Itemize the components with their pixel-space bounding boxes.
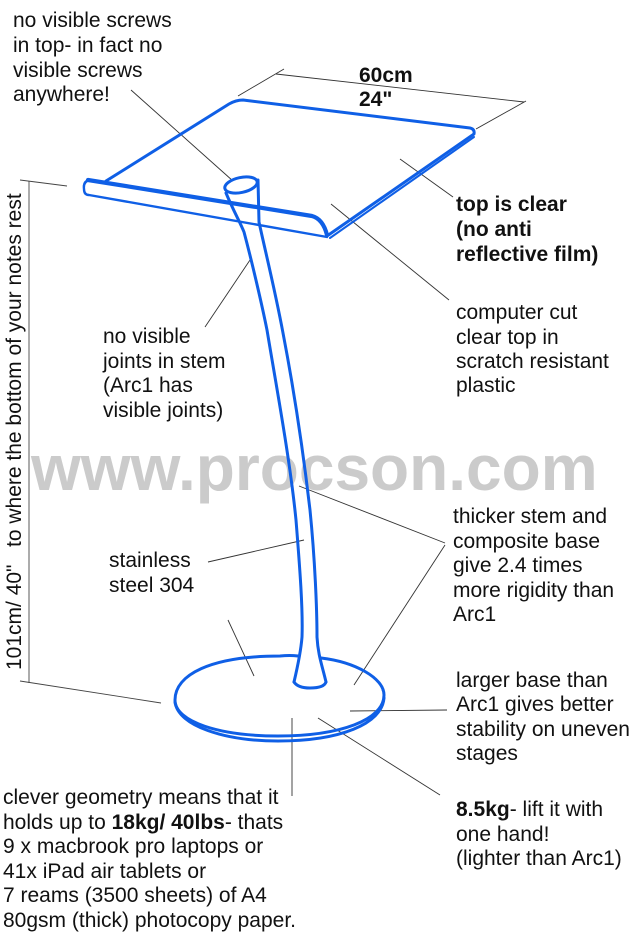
note: top is clear: (no anti (456, 218, 532, 241)
note: stainless: stainless (109, 549, 191, 572)
note: top is clear: reflective film) (456, 243, 598, 266)
watermark: www.procson.com (30, 432, 598, 504)
leader lines (131, 90, 453, 796)
note: weight: (lighter than Arc1) (456, 847, 622, 870)
heading: dimensions: 24" (359, 88, 392, 111)
lectern illustration (84, 100, 474, 741)
note: rigidity: give 2.4 times (453, 554, 583, 577)
note: computer cut: computer cut (456, 301, 578, 324)
note: clever geometry: 41x iPad air tablets or (3, 860, 206, 883)
heading: dimensions: 60cm (359, 64, 413, 87)
note: no visible screws: in top- in fact no (13, 34, 162, 57)
note: no visible screws: anywhere! (13, 83, 110, 106)
note: rigidity: more rigidity than (453, 579, 614, 602)
note: clever geometry: 9 x macbrook pro laptops or (3, 835, 263, 858)
note: rigidity: composite base (453, 530, 600, 553)
note: larger base: stages (456, 742, 518, 765)
note: clever geometry: 18kg/ 40lbs- thats (112, 811, 283, 834)
note: top is clear: top is clear (456, 193, 567, 216)
note: computer cut: plastic (456, 374, 516, 397)
note: joints: joints in stem (102, 350, 226, 373)
note: clever geometry: 7 reams (3500 sheets) of A4 (3, 884, 267, 907)
note: larger base: Arc1 gives better (456, 693, 614, 716)
note: stainless: steel 304 (109, 574, 195, 597)
note: joints: (Arc1 has (103, 374, 193, 397)
note: weight: one hand! (456, 823, 549, 846)
round base (175, 656, 384, 741)
note: larger base: larger base than (456, 669, 608, 692)
note: weight: 8.5kg (456, 798, 510, 821)
note: larger base: stability on uneven (456, 718, 630, 741)
note: rigidity: thicker stem and (453, 505, 607, 528)
note: no visible screws: visible screws (13, 59, 143, 82)
dimension: height (20, 180, 161, 703)
stem (223, 174, 326, 688)
note: rigidity: Arc1 (453, 603, 496, 626)
note: clever geometry: 80gsm (thick) photocopy paper. (3, 909, 296, 932)
note: computer cut: clear top in (456, 326, 559, 349)
note: joints: visible joints) (103, 399, 223, 422)
vertical height label: 101cm/ 40" (3, 564, 26, 670)
vertical height label: to where the bottom of your notes rest (3, 193, 26, 547)
note: clever geometry: clever geometry means that it (3, 786, 279, 809)
note: computer cut: scratch resistant (456, 350, 609, 373)
dimension: width of top (238, 69, 526, 129)
note: no visible screws: no visible screws (13, 9, 172, 32)
note: weight: - lift it with (510, 798, 603, 821)
note: joints: no visible (103, 325, 191, 348)
clear top plate (84, 100, 474, 238)
note: clever geometry: holds up to (3, 811, 112, 834)
